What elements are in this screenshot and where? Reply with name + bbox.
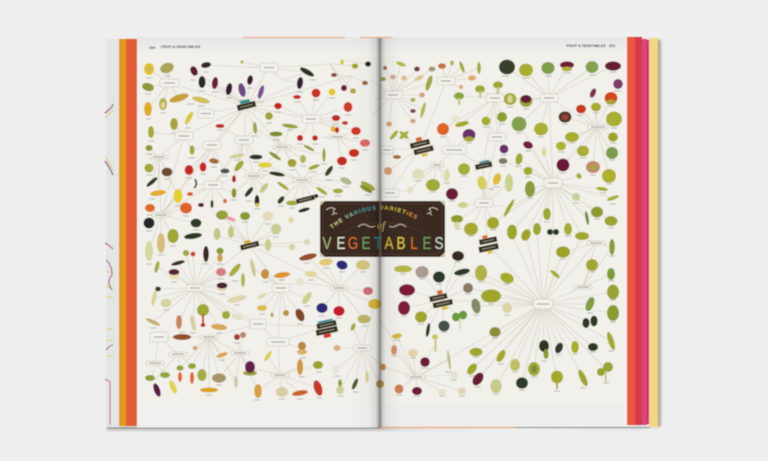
banner: right page below title [476, 233, 500, 256]
hubs: category labels [146, 63, 608, 379]
title vegetables: E [361, 234, 371, 254]
vegetables: roots and tubers cluster, left page bottom [145, 233, 386, 398]
page header left: 200 [149, 46, 155, 50]
inner page decorations [105, 104, 113, 425]
title vegetables: B [397, 234, 406, 254]
gutter shadow [350, 38, 400, 428]
vegetables: fruit vegetables cluster, left page top [141, 59, 376, 228]
left edge strips [105, 39, 138, 427]
flourish around of [358, 224, 406, 227]
flourish top corners [326, 208, 438, 215]
right edge strips [626, 37, 660, 427]
chart background [139, 53, 625, 403]
page edge lines [243, 36, 392, 38]
title line one: THE VARIOUS VARIETIES [329, 205, 418, 229]
title vegetables: L [410, 234, 418, 254]
title word of: of [377, 221, 386, 232]
title vegetables: V [322, 234, 332, 254]
banner: right page middle [474, 159, 493, 170]
banner: leafy double [428, 288, 454, 312]
banners: ribbon tags [236, 98, 500, 340]
banner: beans double [409, 134, 435, 159]
banner: lower left [239, 238, 260, 251]
title vegetables: E [422, 234, 431, 254]
vegetables: beans and peas cluster, top of right page [380, 61, 481, 193]
banner: right of title top [296, 195, 315, 204]
vegetables: leafy greens cluster, right page bottom [391, 239, 619, 395]
section title left: FRUIT & VEGETABLES [161, 45, 201, 49]
book shadow [107, 40, 661, 430]
title vegetables: A [385, 234, 394, 254]
title vegetables: S [434, 234, 443, 254]
title vegetables [322, 234, 443, 254]
right page [380, 37, 627, 426]
hub label marks [149, 68, 605, 377]
corner ornaments [320, 201, 445, 257]
connector lines [148, 60, 618, 393]
page header right: 201 [609, 44, 615, 48]
title vegetables: T [374, 234, 382, 254]
left page [137, 37, 380, 428]
banner: tubers double [314, 318, 339, 340]
banner: upper left [236, 98, 256, 111]
vegetables: brassicas and lettuces cluster, right page top [412, 60, 623, 242]
open book [104, 36, 660, 429]
title vegetables: G [348, 234, 358, 254]
item captions: tiny label marks [145, 72, 621, 400]
title plate [319, 200, 446, 258]
section title right: FRUIT & VEGETABLES [566, 44, 606, 48]
title vegetables: E [337, 234, 346, 254]
vegetables: cluster above centre, left page [167, 210, 294, 243]
arched inner rule [340, 222, 424, 233]
